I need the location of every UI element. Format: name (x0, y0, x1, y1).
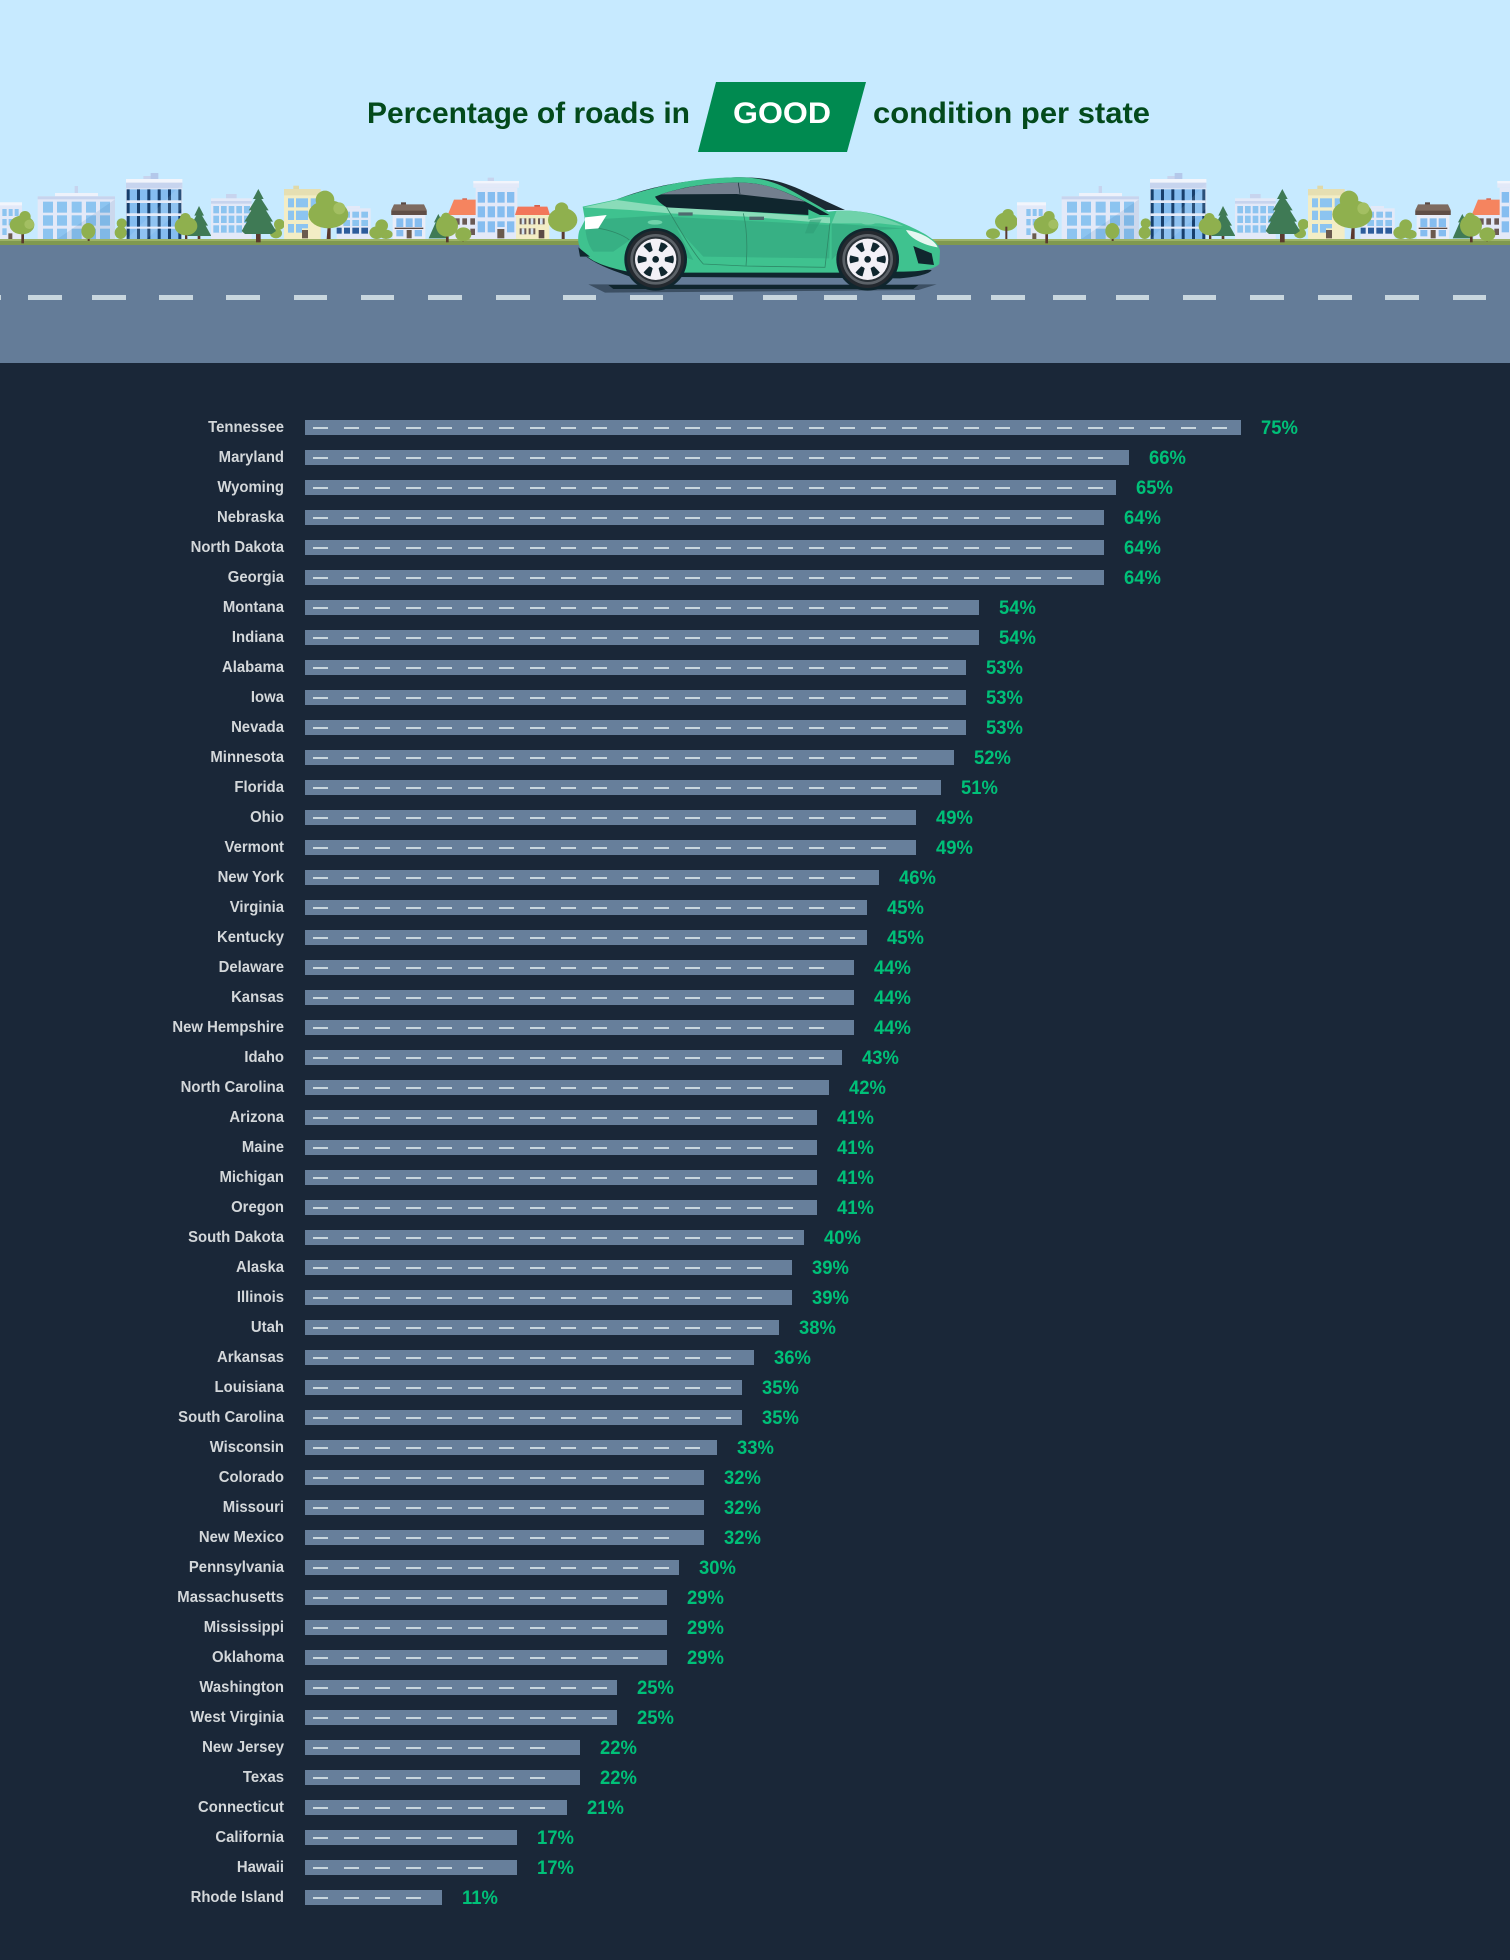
banner: GOOD (698, 82, 866, 152)
row: Illinois: 39% (812, 1288, 849, 1309)
row: Maine (242, 1138, 874, 1159)
title (367, 82, 1150, 152)
row: Oregon: 41% (837, 1198, 874, 1219)
row: Georgia: 64% (1124, 568, 1161, 589)
row: California: California (215, 1829, 284, 1846)
row: Idaho: 43% (862, 1048, 899, 1069)
rear wheel (624, 228, 687, 291)
big tree (308, 191, 348, 239)
row: Michigan: Michigan (220, 1169, 284, 1186)
row: Alaska: 39% (812, 1258, 849, 1279)
row: California: 17% (537, 1828, 574, 1849)
row: Mississippi: Mississippi (204, 1619, 284, 1636)
row: South Dakota (188, 1228, 861, 1249)
row: Kansas (231, 988, 911, 1009)
row: Kentucky: 45% (887, 928, 924, 949)
row: California (150, 1830, 577, 1845)
row: Missouri: 32% (724, 1498, 761, 1519)
row: Indiana: Indiana (232, 629, 284, 646)
row: Mississippi: 29% (687, 1618, 724, 1639)
row: New Mexico: New Mexico (199, 1529, 284, 1546)
building F (347, 206, 360, 208)
row: Wyoming: 65% (1136, 478, 1173, 499)
windows (655, 183, 829, 215)
row: Connecticut (150, 1800, 627, 1815)
row: Ohio: Ohio (250, 809, 284, 826)
row: Minnesota: 52% (974, 748, 1011, 769)
row: Montana: 54% (999, 598, 1036, 619)
row: Rhode Island: 11% (462, 1888, 498, 1909)
row: Louisiana: 35% (762, 1378, 799, 1399)
row: Iowa: Iowa (251, 689, 284, 706)
row: Virginia: Virginia (230, 899, 284, 916)
row: Arizona (229, 1108, 874, 1129)
row: Vermont: 49% (936, 838, 973, 859)
tree 4 (175, 213, 197, 239)
row: Pennsylvania: Pennsylvania (189, 1559, 284, 1576)
row: Virginia: 45% (887, 898, 924, 919)
cityscape right (986, 173, 1510, 243)
row: New Hempshire (172, 1018, 911, 1039)
row: Maryland: 66% (1149, 448, 1186, 469)
header illustration (0, 0, 1510, 363)
row: Delaware: 44% (874, 958, 911, 979)
row: Delaware: Delaware (219, 959, 284, 976)
row: Maryland: Maryland (219, 449, 284, 466)
door lines (598, 207, 830, 267)
row: Minnesota: Minnesota (210, 749, 284, 766)
conifer 1 (187, 206, 211, 239)
row: Virginia (230, 898, 924, 919)
row: Montana: Montana (223, 599, 284, 616)
title text left: Percentage of roads in (367, 97, 690, 130)
row: Nevada (231, 718, 1023, 739)
car shadow (588, 284, 937, 293)
row: Illinois: Illinois (237, 1289, 284, 1306)
row: West Virginia: West Virginia (190, 1709, 284, 1726)
row: Hawaii: Hawaii (237, 1859, 284, 1876)
tree 3 (115, 218, 127, 239)
banner: GOOD: GOOD (733, 97, 831, 130)
row: Iowa (251, 688, 1023, 709)
row: Washington: Washington (199, 1679, 284, 1696)
row: Alabama: 53% (986, 658, 1023, 679)
tree 1 (10, 211, 34, 243)
row: Utah: 38% (799, 1318, 836, 1339)
building A (0, 202, 22, 239)
row: Kansas: Kansas (231, 989, 284, 1006)
row: Louisiana (215, 1378, 799, 1399)
row: Pennsylvania: 30% (699, 1558, 736, 1579)
row: New York: New York (218, 869, 284, 886)
row: Nebraska (217, 508, 1161, 529)
row: Ohio: 49% (936, 808, 973, 829)
building I (473, 178, 519, 239)
row: Alaska: Alaska (236, 1259, 284, 1276)
row: Connecticut: Connecticut (198, 1799, 284, 1816)
row: New Mexico: 32% (724, 1528, 761, 1549)
row: Utah (251, 1318, 836, 1339)
row: Colorado: 32% (724, 1468, 761, 1489)
light strip (583, 200, 830, 223)
row: Ohio (250, 808, 973, 829)
row: Arizona: Arizona (229, 1109, 284, 1126)
row: South Dakota: South Dakota (188, 1229, 284, 1246)
row: South Dakota: 40% (824, 1228, 861, 1249)
row: Florida: Florida (234, 779, 284, 796)
row: Wisconsin: Wisconsin (210, 1439, 284, 1456)
row: New Mexico (199, 1528, 761, 1549)
row: North Dakota (191, 538, 1161, 559)
row: Oklahoma: Oklahoma (212, 1649, 284, 1666)
row: Florida (234, 778, 998, 799)
row: Georgia: Georgia (228, 569, 284, 586)
building B (75, 186, 78, 193)
building E (293, 186, 299, 189)
tree 2 (81, 223, 95, 241)
row: Hawaii (150, 1860, 577, 1875)
row: Arizona: 41% (837, 1108, 874, 1129)
row: Washington: 25% (637, 1678, 674, 1699)
house H (448, 198, 483, 239)
row: Missouri (223, 1498, 761, 1519)
row: Nevada: Nevada (231, 719, 284, 736)
row: Hawaii: 17% (537, 1858, 574, 1879)
row: Georgia (228, 568, 1161, 589)
row: West Virginia (150, 1710, 677, 1725)
row: New York: 46% (899, 868, 936, 889)
tree 7 (548, 202, 577, 239)
row: New Hempshire: New Hempshire (172, 1019, 284, 1036)
row: Indiana (232, 628, 1036, 649)
row: New Hempshire: 44% (874, 1018, 911, 1039)
row: Delaware (219, 958, 911, 979)
row: Maine: Maine (242, 1139, 284, 1156)
cityscape left (0, 173, 577, 243)
row: Texas: 22% (600, 1768, 637, 1789)
house G (391, 202, 427, 239)
row: Illinois (237, 1288, 849, 1309)
row: Alabama: Alabama (222, 659, 284, 676)
row: North Carolina: North Carolina (181, 1079, 284, 1096)
row: New Jersey: New Jersey (202, 1739, 284, 1756)
body shading (585, 215, 903, 260)
bar chart: roads in good condition by state (172, 418, 1298, 1909)
row: North Carolina: 42% (849, 1078, 886, 1099)
road (0, 239, 1510, 363)
row: Texas: Texas (243, 1769, 284, 1786)
row: North Dakota: North Dakota (191, 539, 284, 556)
sky (0, 0, 1510, 245)
row: Vermont: Vermont (224, 839, 284, 856)
row: Mississippi (150, 1620, 727, 1635)
house J (515, 205, 550, 239)
roof edge and underbody (617, 177, 845, 210)
row: New Jersey (150, 1740, 640, 1755)
tree 5 (270, 219, 285, 238)
row: Florida: 51% (961, 778, 998, 799)
row: South Carolina: 35% (762, 1408, 799, 1429)
row: Tennessee: 75% (1261, 418, 1298, 439)
row: Massachusetts: Massachusetts (177, 1589, 284, 1606)
row: Massachusetts (150, 1590, 727, 1605)
row: New York (218, 868, 936, 889)
building C (143, 176, 152, 179)
row: Montana (223, 598, 1036, 619)
row: Connecticut: 21% (587, 1798, 624, 1819)
conifer 2 (242, 189, 276, 242)
row: Minnesota (210, 748, 1011, 769)
row: Colorado (219, 1468, 761, 1489)
row: Oklahoma (150, 1650, 727, 1665)
title text right: condition per state (873, 97, 1150, 130)
row: Alaska (236, 1258, 849, 1279)
building D (226, 194, 237, 198)
row: Idaho (244, 1048, 899, 1069)
row: Rhode Island (150, 1890, 502, 1905)
row: Arkansas: Arkansas (217, 1349, 284, 1366)
row: Washington (150, 1680, 677, 1695)
arch highlights (648, 220, 876, 225)
car (578, 177, 940, 293)
row: Arkansas (217, 1348, 811, 1369)
row: Texas (150, 1770, 640, 1785)
row: Tennessee: Tennessee (208, 419, 284, 436)
row: Nebraska: Nebraska (217, 509, 284, 526)
car body (578, 177, 940, 273)
row: West Virginia: 25% (637, 1708, 674, 1729)
row: New Jersey: 22% (600, 1738, 637, 1759)
row: Rhode Island: Rhode Island (191, 1889, 284, 1906)
row: Wisconsin (210, 1438, 774, 1459)
row: Indiana: 54% (999, 628, 1036, 649)
row: South Carolina: South Carolina (178, 1409, 284, 1426)
front wheel (836, 228, 899, 291)
row: Arkansas: 36% (774, 1348, 811, 1369)
shrub (369, 219, 393, 239)
row: North Dakota: 64% (1124, 538, 1161, 559)
row: Tennessee (208, 418, 1298, 439)
row: South Carolina (178, 1408, 799, 1429)
row: Pennsylvania (150, 1560, 739, 1575)
row: Maryland (219, 448, 1186, 469)
row: Vermont (224, 838, 973, 859)
row: Idaho: Idaho (244, 1049, 284, 1066)
row: Utah: Utah (251, 1319, 284, 1336)
row: Wisconsin: 33% (737, 1438, 774, 1459)
row: Missouri: Missouri (223, 1499, 284, 1516)
row: Michigan: 41% (837, 1168, 874, 1189)
row: Massachusetts: 29% (687, 1588, 724, 1609)
row: Oregon: Oregon (231, 1199, 284, 1216)
row: Alabama (222, 658, 1023, 679)
row: Nebraska: 64% (1124, 508, 1161, 529)
handles and mirror (678, 212, 764, 220)
row: Kansas: 44% (874, 988, 911, 1009)
conifer 3 (429, 214, 448, 238)
row: Wyoming (217, 478, 1173, 499)
row: Wyoming: Wyoming (217, 479, 284, 496)
row: Colorado: Colorado (219, 1469, 284, 1486)
row: North Carolina (181, 1078, 886, 1099)
row: Kentucky: Kentucky (217, 929, 284, 946)
tree 6 (436, 213, 458, 242)
row: Iowa: 53% (986, 688, 1023, 709)
shrub 2 (455, 227, 471, 242)
row: Oklahoma: 29% (687, 1648, 724, 1669)
row: Kentucky (217, 928, 924, 949)
row: Oregon (231, 1198, 874, 1219)
row: Maine: 41% (837, 1138, 874, 1159)
lights and intakes (585, 215, 607, 229)
row: Nevada: 53% (986, 718, 1023, 739)
row: Michigan (220, 1168, 874, 1189)
row: Louisiana: Louisiana (215, 1379, 284, 1396)
